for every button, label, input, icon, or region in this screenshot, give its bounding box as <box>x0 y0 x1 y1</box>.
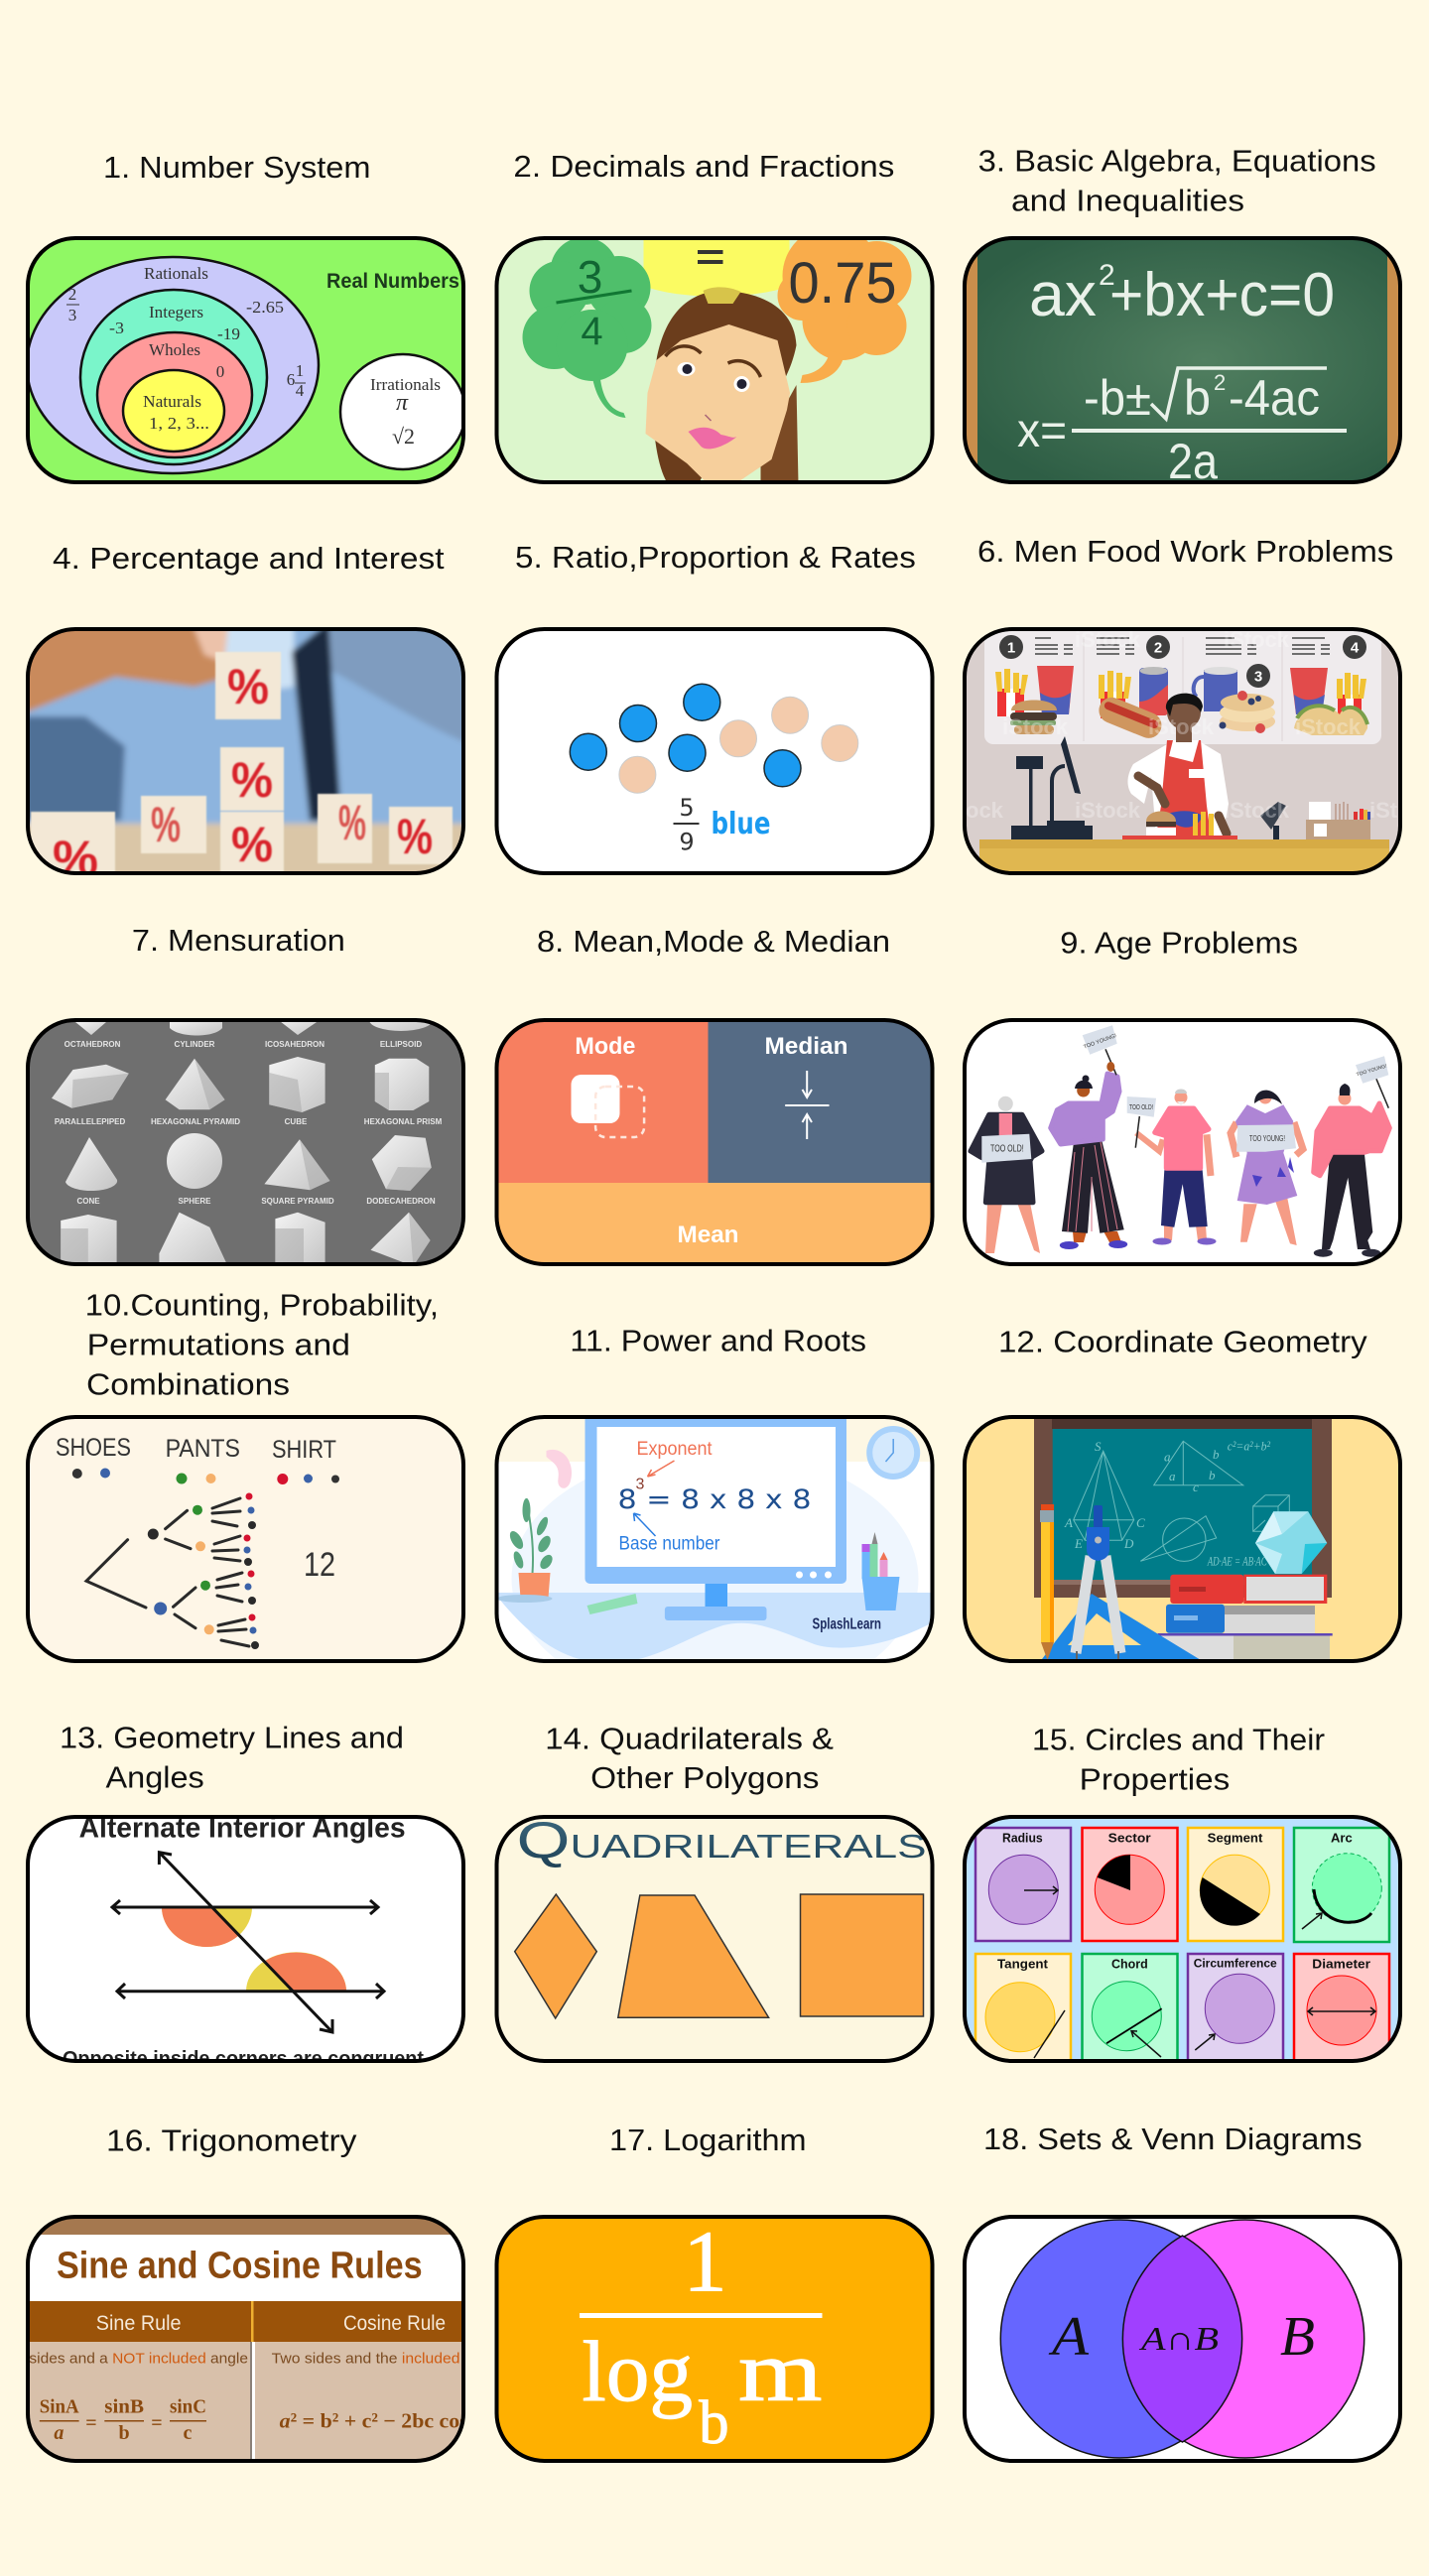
stock watermarks: ock <box>966 798 1004 823</box>
heading 7: 7. Mensuration <box>132 923 345 958</box>
set labels: Naturals <box>143 392 201 411</box>
cosine rule formula: a² = b² + c² − 2bc cos <box>280 2409 468 2433</box>
set labels: 1 <box>296 361 304 380</box>
panel: sine and cosine rules <box>26 2215 468 2463</box>
card: circumference: Circumference <box>1194 1957 1277 1971</box>
exponent callout: Exponent <box>637 1439 713 1460</box>
sine rule formula: sinB <box>104 2396 144 2418</box>
quadratic equation <box>1032 264 1333 316</box>
real numbers label: Real Numbers <box>326 270 459 293</box>
fraction three quarters <box>556 260 632 345</box>
solid names: CYLINDER <box>175 1040 215 1049</box>
person: woman in purple dress: TOO YOUNG! <box>1249 1134 1285 1143</box>
set labels: B <box>1280 2306 1315 2368</box>
heading 13: Angles <box>105 1759 204 1794</box>
diagram caption: Opposite inside corners are congruent <box>63 2048 424 2070</box>
counter <box>979 839 1389 871</box>
blurred photo background <box>30 631 461 871</box>
card: radius: Radius <box>1002 1831 1043 1846</box>
heading 15: 15. Circles and Their <box>1032 1722 1325 1756</box>
woman looking up <box>645 287 798 484</box>
quadratic formula <box>1017 368 1347 489</box>
card: sector: Sector <box>1108 1831 1151 1846</box>
quadratic formula: 2 <box>1214 370 1226 395</box>
heading 10: 10.Counting, Probability, <box>85 1287 439 1322</box>
set labels: Irrationals <box>370 375 441 394</box>
heading 3: and Inequalities <box>1011 184 1244 218</box>
white 3D solids <box>52 1009 433 1266</box>
numbered badges <box>999 635 1366 688</box>
sine rule notes <box>29 2351 459 2368</box>
panel: counting tree diagram <box>26 1415 465 1663</box>
person: woman in purple dress <box>1231 1091 1303 1245</box>
person: older man: TOO OLD! <box>1129 1104 1153 1111</box>
person: young man raising sign <box>1314 1056 1389 1257</box>
panel: percentage blocks: % <box>151 797 181 852</box>
card: segment <box>1188 1828 1283 1941</box>
heading 12: 12. Coordinate Geometry <box>998 1325 1367 1359</box>
panel: fast food worker <box>963 627 1402 875</box>
heading 2: 2. Decimals and Fractions <box>513 149 894 184</box>
chalk formulas: c²=a²+b² <box>1228 1439 1271 1454</box>
panel: basic algebra chalkboard <box>963 236 1402 489</box>
tree nodes <box>148 1492 259 1649</box>
heading 3: 3. Basic Algebra, Equations <box>978 144 1376 179</box>
chalk formulas: D <box>1123 1536 1134 1551</box>
gem <box>1255 1511 1327 1574</box>
numbered badges: 1 <box>1007 639 1015 657</box>
heading 16: 16. Trigonometry <box>106 2123 357 2157</box>
sine rule formula: b <box>118 2422 130 2444</box>
peach dots <box>619 697 858 793</box>
sine rule formula: c <box>184 2422 193 2444</box>
panel: venn diagram <box>963 2215 1402 2463</box>
chalk formulas <box>1064 1439 1271 1568</box>
heading 10: Combinations <box>86 1366 290 1401</box>
quadratic formula: b <box>1184 370 1211 426</box>
quadratic formula: 2a <box>1168 434 1218 489</box>
quadratic equation: ax <box>1029 261 1097 329</box>
panel: decimals and fractions <box>494 226 935 484</box>
solid names: ICOSAHEDRON <box>265 1040 325 1049</box>
heading 1: 1. Number System <box>103 150 371 185</box>
set labels: √2 <box>392 424 415 449</box>
yellow thought cloud <box>643 236 790 297</box>
set labels: 4 <box>296 381 305 400</box>
five ninths blue label: blue <box>711 807 770 841</box>
quadratic equation: +bx+c=0 <box>1109 261 1335 329</box>
column labels: PANTS <box>166 1435 240 1463</box>
log formula <box>580 2214 822 2457</box>
panel: alternate interior angles <box>26 1813 465 2070</box>
sine rule formula: sinC <box>170 2396 206 2418</box>
heading 4: 4. Percentage and Interest <box>53 541 445 576</box>
stock watermarks <box>967 637 1397 818</box>
set labels: -3 <box>109 319 124 337</box>
median quadrant: Median <box>764 1033 847 1060</box>
chalk formulas: c <box>1193 1480 1199 1494</box>
solid names: ELLIPSOID <box>380 1040 422 1049</box>
cash register <box>1011 736 1093 839</box>
parallel lines and transversal <box>112 1853 384 2032</box>
compass <box>1076 1505 1120 1662</box>
quadratic equation: 2 <box>1099 259 1115 292</box>
rectangle <box>800 1894 923 2016</box>
quadratic formula: -b± <box>1084 370 1151 426</box>
stock watermarks: iStock <box>1148 714 1215 739</box>
chalk formulas: C <box>1136 1515 1145 1530</box>
panel: percentage blocks: % <box>231 752 273 808</box>
log formula: 1 <box>683 2214 726 2310</box>
five ninths blue label: 5 <box>679 794 695 822</box>
table header <box>26 2301 465 2342</box>
chalk formulas: AD·AE = AB·AC <box>1207 1553 1267 1568</box>
stock watermarks: iStock <box>1224 798 1290 823</box>
panel: power and roots <box>494 1409 935 1708</box>
solid names: PARALLELEPIPED <box>55 1117 126 1126</box>
shaded faces <box>61 1059 432 1266</box>
card: sector <box>1082 1828 1177 1941</box>
solid names: HEXAGONAL PRISM <box>364 1117 443 1126</box>
person: older woman: TOO OLD! <box>990 1144 1024 1155</box>
fraction three quarters: 4 <box>581 310 603 353</box>
heading 14: Other Polygons <box>590 1760 820 1795</box>
solid names: SQUARE PYRAMID <box>261 1197 334 1206</box>
card: tangent <box>975 1954 1071 2083</box>
wall clock <box>866 1426 920 1480</box>
five ninths blue label <box>673 798 770 850</box>
set labels: A∩B <box>1139 2321 1219 2358</box>
green thought cloud <box>522 237 651 418</box>
panel: percentage blocks: % <box>338 795 366 850</box>
panel: age problems people <box>963 1018 1402 1266</box>
card: segment: Segment <box>1208 1831 1263 1846</box>
cashier <box>1127 694 1229 836</box>
person: woman raising sign <box>1051 1025 1127 1249</box>
exponent callout <box>635 1439 713 1493</box>
legend dots <box>72 1469 339 1484</box>
mean band: Mean <box>677 1222 738 1248</box>
card: chord: Chord <box>1111 1956 1148 1971</box>
card: circumference <box>1188 1954 1283 2083</box>
sine rule formula: a <box>54 2422 64 2444</box>
heading 17: 17. Logarithm <box>609 2123 807 2157</box>
column labels: SHIRT <box>272 1436 336 1464</box>
set labels: π <box>396 390 409 416</box>
person: older woman <box>971 1096 1042 1253</box>
panel: percentage blocks: % <box>227 659 269 714</box>
base number callout <box>619 1513 720 1555</box>
chalk formulas: E <box>1074 1536 1083 1551</box>
angle shading <box>162 1907 346 1992</box>
solid names: SPHERE <box>179 1197 211 1206</box>
card: arc: Arc <box>1331 1831 1353 1846</box>
card terminal <box>1260 802 1286 839</box>
card: tangent: Tangent <box>997 1956 1049 1971</box>
solid names <box>55 1040 443 1206</box>
panel: percentage blocks <box>26 627 465 875</box>
numbered badges: 4 <box>1351 639 1360 657</box>
percent cubes <box>31 652 453 875</box>
quadratic formula: -4ac <box>1229 370 1320 426</box>
mean band <box>494 1183 935 1266</box>
heading 6: 6. Men Food Work Problems <box>977 534 1393 569</box>
heading 15 <box>1032 1722 1325 1796</box>
panel: logarithm <box>494 2214 935 2463</box>
blue dots <box>570 684 801 787</box>
panel: circle properties <box>963 1815 1402 2083</box>
sine rule formula: = <box>85 2412 97 2434</box>
table header: Cosine Rule <box>343 2312 446 2335</box>
book stack <box>1158 1575 1333 1663</box>
median quadrant <box>709 1018 935 1183</box>
stock watermarks: iStock <box>1002 714 1069 739</box>
fraction three quarters: 3 <box>578 251 602 303</box>
monitor <box>585 1409 846 1620</box>
sine rule notes: Two sides and the included <box>272 2351 459 2368</box>
slide title: Sine and Cosine Rules <box>57 2246 423 2287</box>
chalk formulas: a <box>1164 1450 1171 1465</box>
heading 14: 14. Quadrilaterals & <box>545 1722 834 1756</box>
heading 13 <box>60 1720 404 1794</box>
counter items <box>1306 802 1370 839</box>
solid names: HEXAGONAL PYRAMID <box>151 1117 240 1126</box>
brand logo: SplashLearn <box>812 1616 881 1633</box>
table body <box>26 2342 465 2463</box>
heading 10: Permutations and <box>87 1327 350 1361</box>
numbered badges: 3 <box>1254 669 1262 685</box>
stock watermarks: iStock <box>1295 714 1362 739</box>
card: diameter: Diameter <box>1312 1956 1370 1971</box>
set labels: 6 <box>287 370 295 389</box>
person: woman raising sign: TOO YOUNG! <box>1083 1033 1118 1051</box>
set labels: 0 <box>216 362 224 381</box>
solid names: CONE <box>76 1197 100 1206</box>
decimal 0.75: 0.75 <box>788 251 897 316</box>
panel: percentage blocks: % <box>397 809 433 864</box>
sine rule formula: = <box>151 2412 163 2434</box>
log formula: log <box>582 2323 693 2419</box>
tray with meal <box>1122 811 1237 839</box>
heading 13: 13. Geometry Lines and <box>60 1720 404 1754</box>
chalk formulas: b <box>1209 1468 1216 1482</box>
solid names: DODECAHEDRON <box>366 1197 436 1206</box>
panel: quadrilaterals <box>494 1812 935 2063</box>
column labels <box>56 1434 336 1464</box>
card: radius <box>975 1828 1071 1941</box>
set labels: -2.65 <box>246 298 284 317</box>
stock watermarks: iStock <box>1075 627 1141 652</box>
mode quadrant <box>494 1018 709 1183</box>
panel: coordinate geometry <box>963 1415 1402 1663</box>
set labels <box>68 264 441 449</box>
panel: ratio dots <box>494 627 935 875</box>
pencil <box>1040 1504 1054 1660</box>
exponent callout: 3 <box>635 1477 645 1493</box>
heading 9: 9. Age Problems <box>1060 926 1298 961</box>
heading 5: 5. Ratio,Proportion & Rates <box>515 540 916 575</box>
set labels: A <box>1048 2306 1090 2368</box>
quadratic formula: x= <box>1017 405 1067 457</box>
heading 10 <box>85 1287 439 1401</box>
set labels: -19 <box>217 324 240 343</box>
set labels: 2 <box>68 285 76 304</box>
heading 8: 8. Mean,Mode & Median <box>537 924 890 959</box>
set circles <box>1000 2220 1364 2458</box>
rhombus <box>515 1894 596 2018</box>
stock watermarks: iStock <box>1075 798 1141 823</box>
person: older man <box>1127 1090 1217 1244</box>
heading 18: 18. Sets & Venn Diagrams <box>983 2122 1363 2156</box>
tree branches <box>86 1498 249 1646</box>
pen cup <box>861 1532 899 1610</box>
set labels: Wholes <box>149 340 200 359</box>
log formula: b <box>699 2389 728 2457</box>
set square <box>1039 1594 1206 1663</box>
card: arc <box>1294 1828 1389 1942</box>
numbered badges: 2 <box>1154 639 1162 657</box>
solid names: CUBE <box>285 1117 308 1126</box>
food combo one <box>995 666 1074 734</box>
chalk formulas: a <box>1169 1469 1176 1483</box>
set labels: Integers <box>149 303 203 322</box>
panel: mean mode median <box>494 1018 935 1266</box>
answer 12: 12 <box>304 1546 335 1584</box>
panel: percentage blocks: % <box>231 817 273 872</box>
set labels: 3 <box>68 306 76 324</box>
heading 11: 11. Power and Roots <box>570 1323 866 1357</box>
five ninths blue label: 9 <box>679 829 695 856</box>
crayon <box>587 1594 637 1614</box>
chalk formulas: A <box>1064 1515 1073 1530</box>
base number callout: Base number <box>619 1534 720 1555</box>
diagram title: Alternate Interior Angles <box>79 1813 406 1845</box>
power equation: 8 = 8 x 8 x 8 <box>617 1484 812 1515</box>
food combo four <box>1290 668 1367 735</box>
trapezoid <box>618 1895 769 2017</box>
stock watermarks: iStock <box>1224 627 1290 652</box>
solid names: OCTAHEDRON <box>65 1040 121 1049</box>
column labels: SHOES <box>56 1434 131 1462</box>
menu board <box>984 631 1381 744</box>
table header: Sine Rule <box>96 2312 181 2335</box>
desk <box>494 1593 935 1663</box>
set labels <box>1048 2306 1315 2368</box>
log formula: m <box>738 2323 822 2419</box>
sine rule notes: sides and a NOT included angle <box>29 2351 248 2368</box>
quadrilaterals title: Q UADRILATERALS <box>516 1812 927 1869</box>
chalk formulas: b <box>1213 1447 1220 1462</box>
chalk formulas: S <box>1095 1439 1102 1454</box>
chalk drawings <box>1074 1441 1289 1561</box>
set labels: Rationals <box>144 264 208 283</box>
set labels: 1, 2, 3... <box>149 414 209 433</box>
food combo two <box>1095 667 1168 742</box>
wooden frame <box>967 256 1398 464</box>
food combo three <box>1194 667 1275 733</box>
heading 15: Properties <box>1080 1761 1230 1796</box>
card: chord <box>1082 1954 1177 2083</box>
orange thought cloud <box>778 226 911 383</box>
panel: mensuration solids <box>26 1009 465 1266</box>
chalkboard <box>1034 1415 1332 1598</box>
mode quadrant: Mode <box>575 1033 635 1060</box>
sine rule formula <box>40 2396 206 2444</box>
nested sets diagram <box>27 257 465 473</box>
panel: percentage blocks: % <box>53 831 98 886</box>
pink shape <box>546 1450 572 1488</box>
card: diameter <box>1294 1954 1389 2083</box>
sine rule formula: SinA <box>40 2396 79 2418</box>
potted plant <box>496 1498 555 1603</box>
heading 14 <box>545 1722 834 1795</box>
person: young man raising sign: TOO YOUNG! <box>1356 1063 1387 1078</box>
textured top strip <box>26 2215 465 2235</box>
panel: number system <box>26 236 465 484</box>
heading 3 <box>978 144 1376 218</box>
equals sign <box>698 252 722 262</box>
